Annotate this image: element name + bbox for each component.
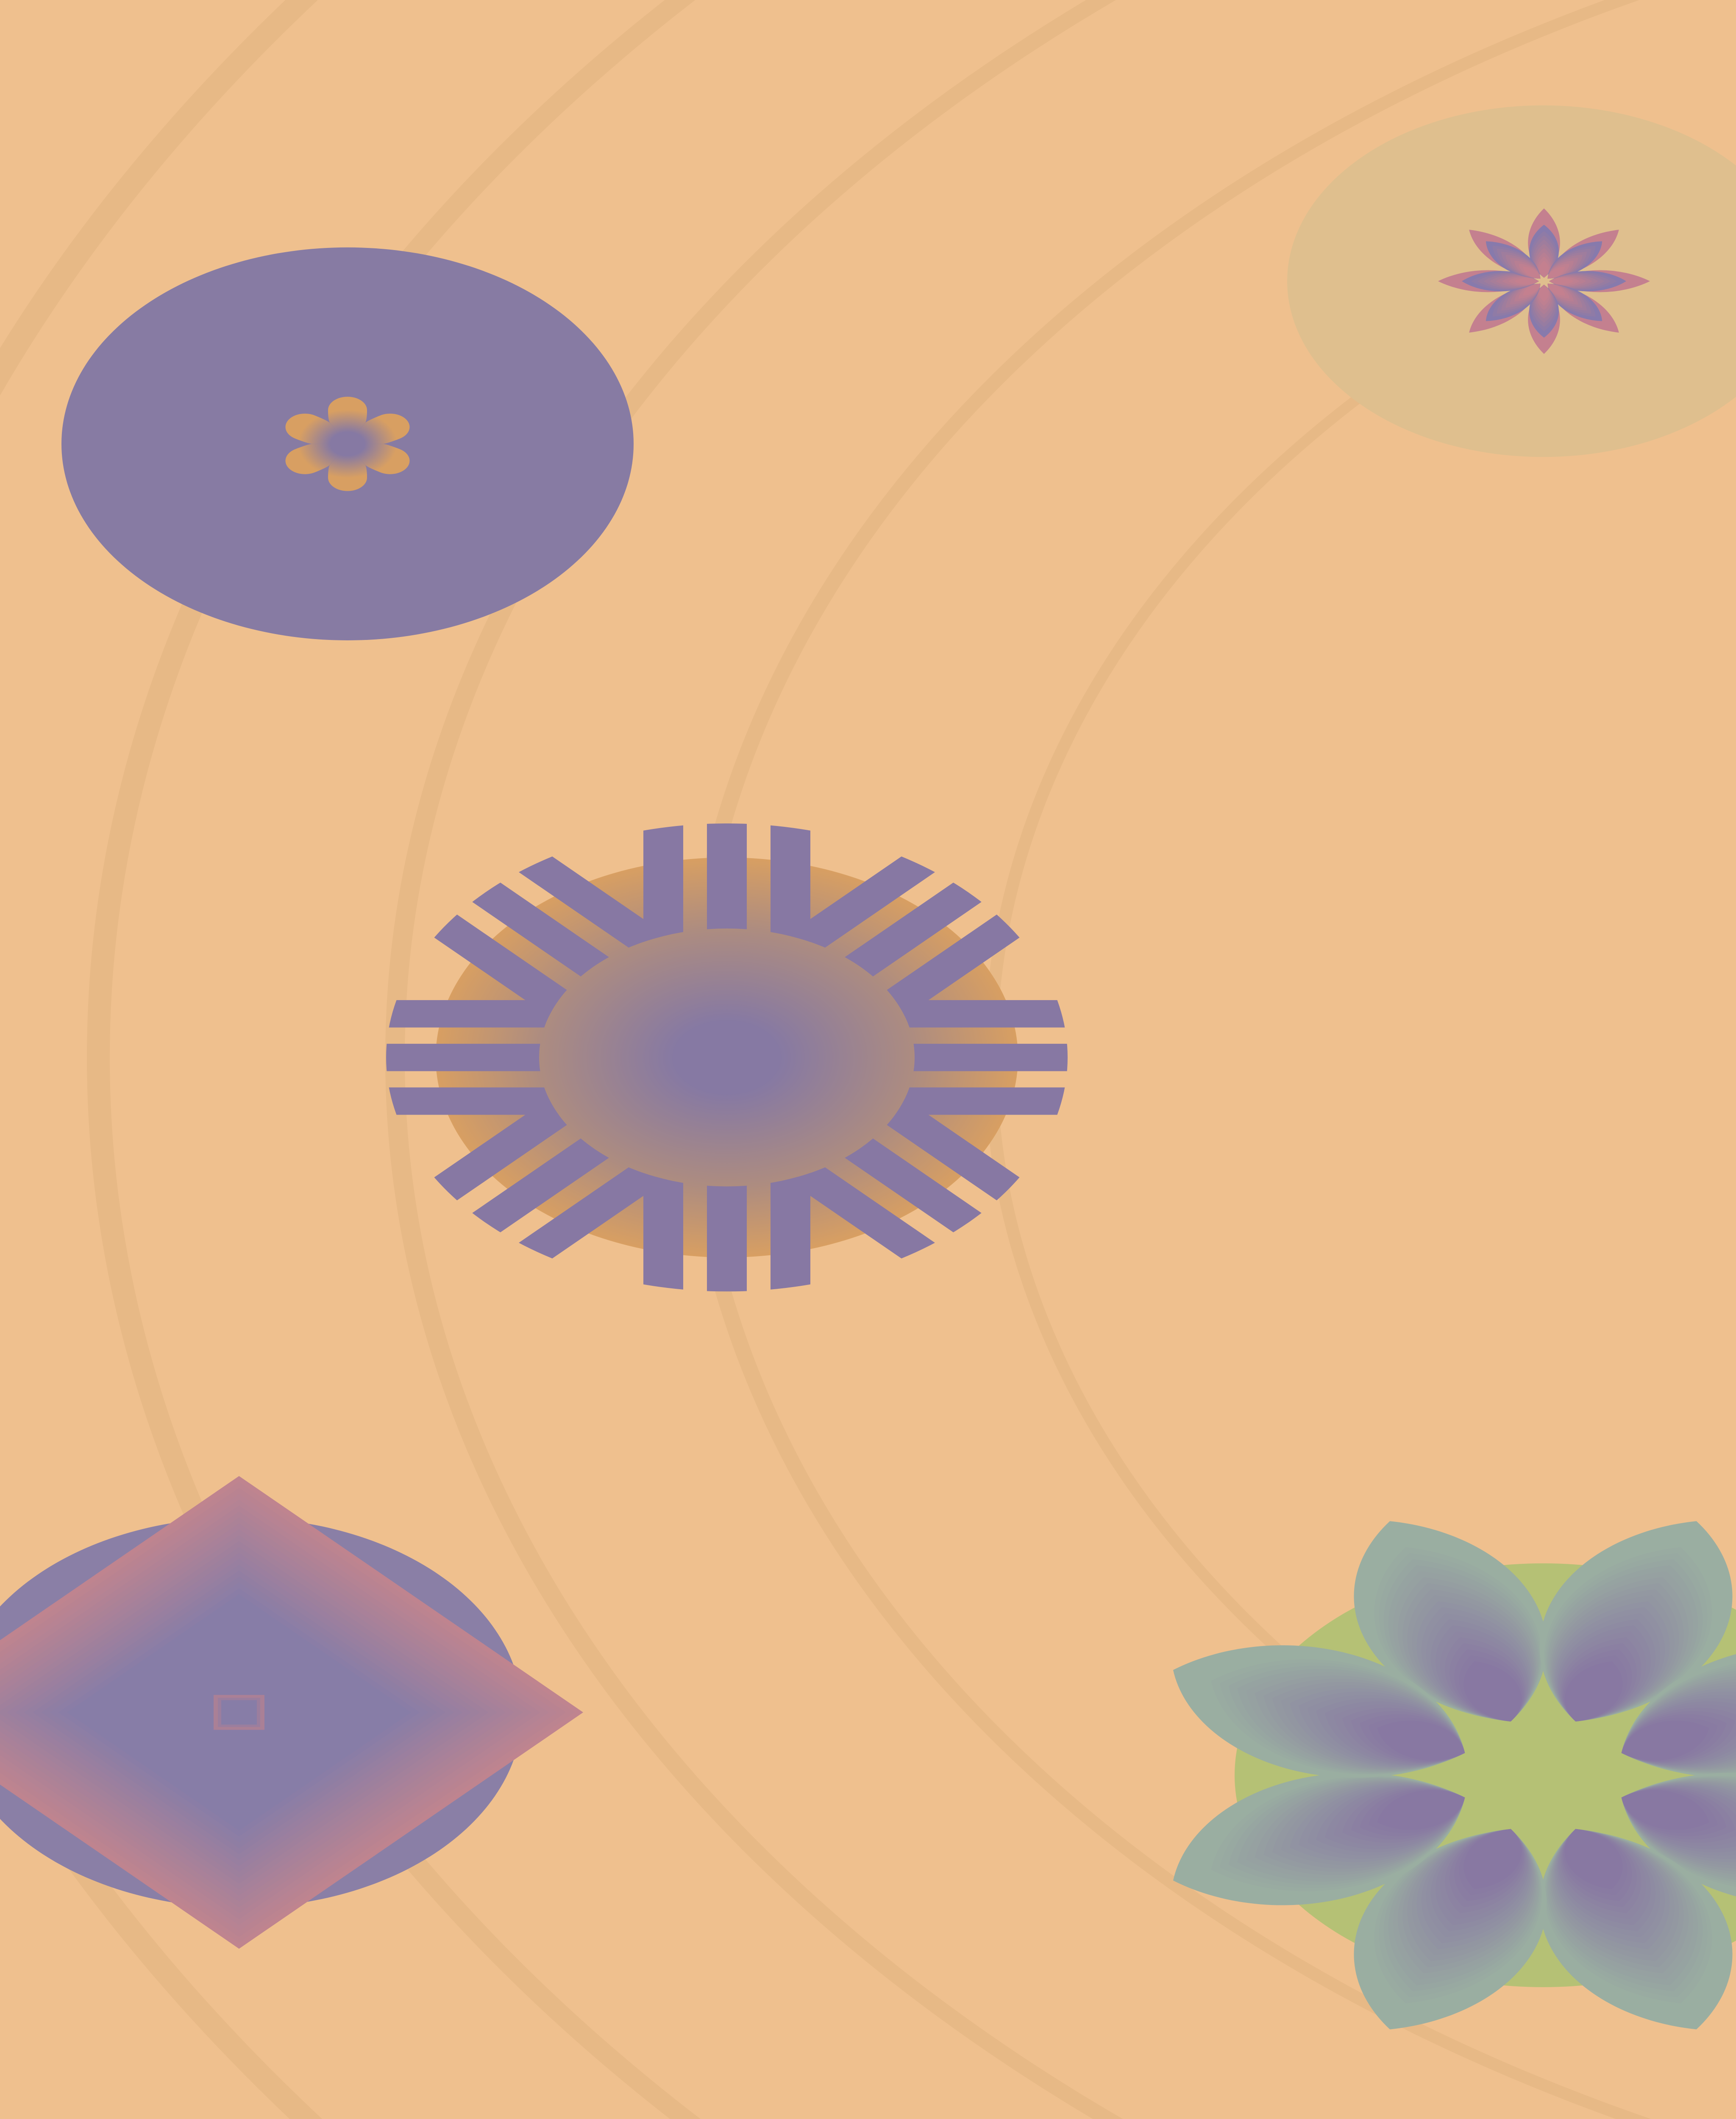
panel: top-right sand circle with lotus flower (1287, 106, 1736, 457)
panel: bottom-left circle with diamond (0, 1476, 583, 1949)
icon: six-lobed orange flower (278, 397, 417, 491)
panel: bottom-right green circle with petals (1139, 1498, 1736, 2053)
sunburst gradient disc (436, 857, 1018, 1257)
sunburst purple bars (384, 822, 1070, 1293)
panel: top-left purple circle with orange flower (61, 247, 634, 640)
icon: eight gradient petals (1139, 1498, 1736, 2053)
pink to purple diamond (0, 1476, 583, 1949)
small centre square (214, 1695, 264, 1730)
icon: eight-petal pink and blue flower (1438, 209, 1650, 354)
panel: central sunburst (384, 822, 1070, 1293)
purple circle (0, 1518, 522, 1908)
